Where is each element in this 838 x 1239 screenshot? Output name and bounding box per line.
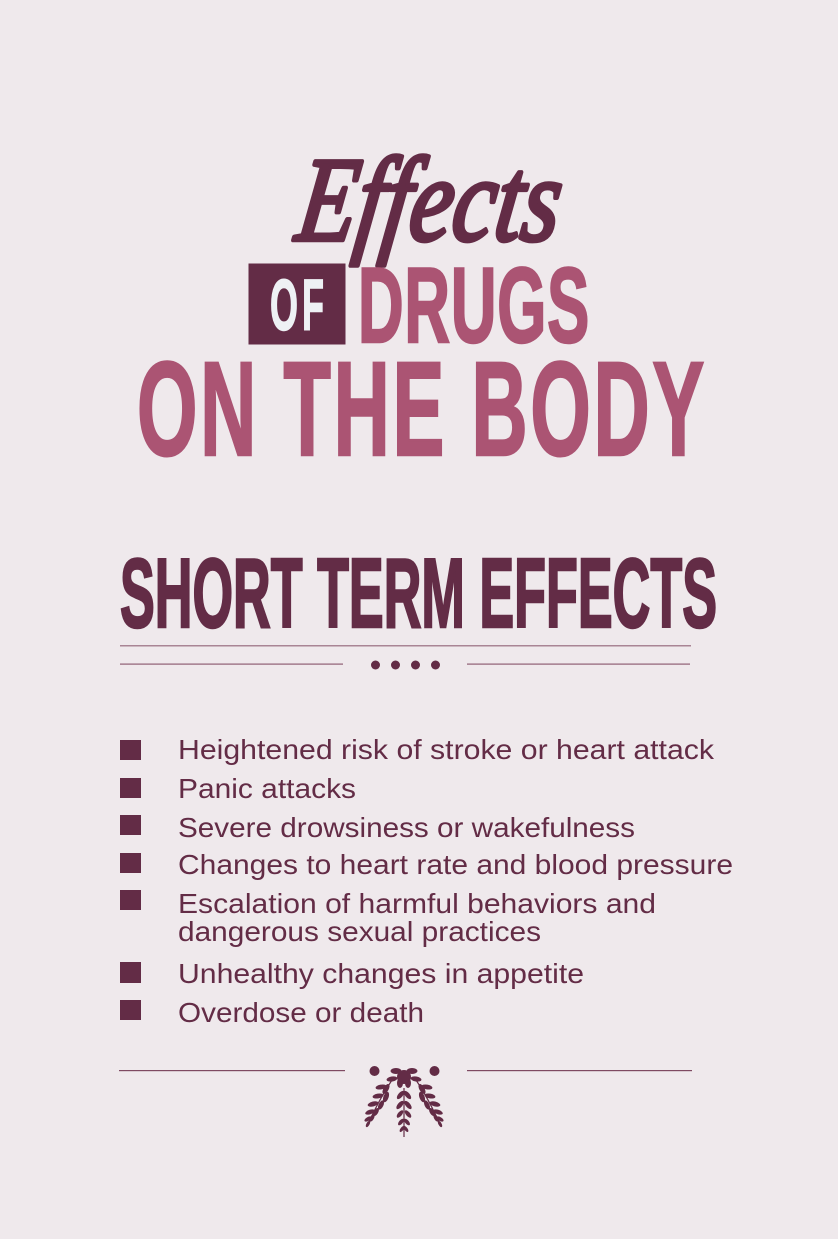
list item: harmful behaviors: dangerous sexual practices	[178, 916, 541, 947]
list item: heart rate: Changes to heart rate and blood pressure	[178, 849, 733, 880]
list item: overdose: Overdose or death	[178, 997, 424, 1028]
list item: harmful behaviors	[120, 888, 656, 947]
title: DRUGS: DRUGS	[358, 245, 589, 365]
heading divider with dots	[120, 645, 691, 670]
title: ON THE BODY: ON THE BODY	[137, 335, 704, 484]
icon: leaf sprigs	[364, 1068, 444, 1137]
list item: stroke or heart attack: Heightened risk of stroke or heart attack	[178, 734, 715, 765]
footer divider lines and dots	[119, 1066, 692, 1076]
list item: panic attacks: Panic attacks	[178, 773, 356, 804]
list item: drowsiness: Severe drowsiness or wakefulness	[178, 812, 635, 843]
title: OF badge: OF	[270, 265, 324, 346]
title: script word Effects: Effects	[289, 135, 571, 267]
list item: harmful behaviors: Escalation of harmful behaviors and	[178, 888, 656, 919]
list of short term effects	[120, 734, 733, 1028]
title: OF badge	[248, 264, 346, 346]
list item: appetite: Unhealthy changes in appetite	[178, 958, 584, 989]
